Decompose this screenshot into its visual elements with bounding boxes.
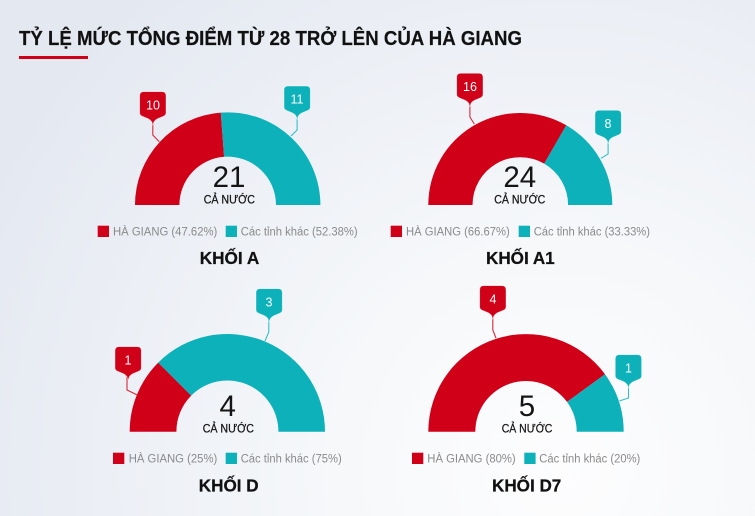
centre caption: CẢ NƯỚC [494,191,546,206]
centre caption: CẢ NƯỚC [203,420,254,435]
donut segment: Hà Giang [130,363,191,432]
callout: 10: 10 [146,98,160,112]
donut segment: other provinces [544,125,612,205]
callout: 11 [284,86,310,136]
title: TỶ LỆ MỨC TỔNG ĐIỂM TỪ 28 TRỞ LÊN CỦA HÀ GIANG [19,26,522,50]
donut segment: Hà Giang [428,334,605,432]
legend [113,452,342,465]
panel: Khối D [113,289,342,496]
callout: 11: 11 [291,92,304,106]
panel: Khối D7 [412,286,642,496]
centre total: 21 [213,161,245,194]
legend: HÀ GIANG (80%) [427,452,516,465]
legend [391,226,650,238]
legend: Các tỉnh khác (52.38%) [241,226,358,238]
legend: Các tỉnh khác (75%) [241,453,342,465]
centre total: 5 [519,390,535,423]
callout: 16: 16 [463,80,477,94]
title underline [19,56,88,59]
callout: 1 [115,347,141,395]
callout: 8 [595,110,621,158]
callout: 8: 8 [605,117,612,131]
donut segment: other provinces [221,112,320,205]
centre caption: CẢ NƯỚC [502,420,553,435]
panel heading: KHỐI A1 [486,247,555,268]
panel heading: KHỐI D7 [492,475,561,496]
legend: Các tỉnh khác (33.33%) [534,226,650,238]
callout: 10 [140,92,166,142]
panel heading: KHỐI A [200,247,260,268]
legend [98,226,358,238]
callout: 3: 3 [266,296,273,310]
legend: Các tỉnh khác (20%) [539,453,640,465]
legend [412,452,640,465]
centre total: 24 [503,161,536,194]
legend: HÀ GIANG (47.62%) [113,226,217,238]
donut segment: other provinces [158,334,325,432]
panel: Khối A1 [391,73,650,268]
callout: 4 [480,286,506,338]
callout: 1 [615,355,642,401]
centre total: 4 [219,390,236,423]
panel: Khối A [98,86,358,268]
callout: 1: 1 [625,362,632,376]
donut segment: Hà Giang [428,113,566,205]
callout: 1: 1 [125,354,132,368]
callout: 3 [256,289,282,341]
callout: 16 [457,73,483,124]
donut segment: Hà Giang [135,113,224,205]
callout: 4: 4 [490,292,497,306]
centre caption: CẢ NƯỚC [204,191,255,206]
legend: HÀ GIANG (66.67%) [406,226,510,238]
panel heading: KHỐI D [199,475,259,496]
donut segment: other provinces [567,374,624,432]
legend: HÀ GIANG (25%) [129,452,217,465]
